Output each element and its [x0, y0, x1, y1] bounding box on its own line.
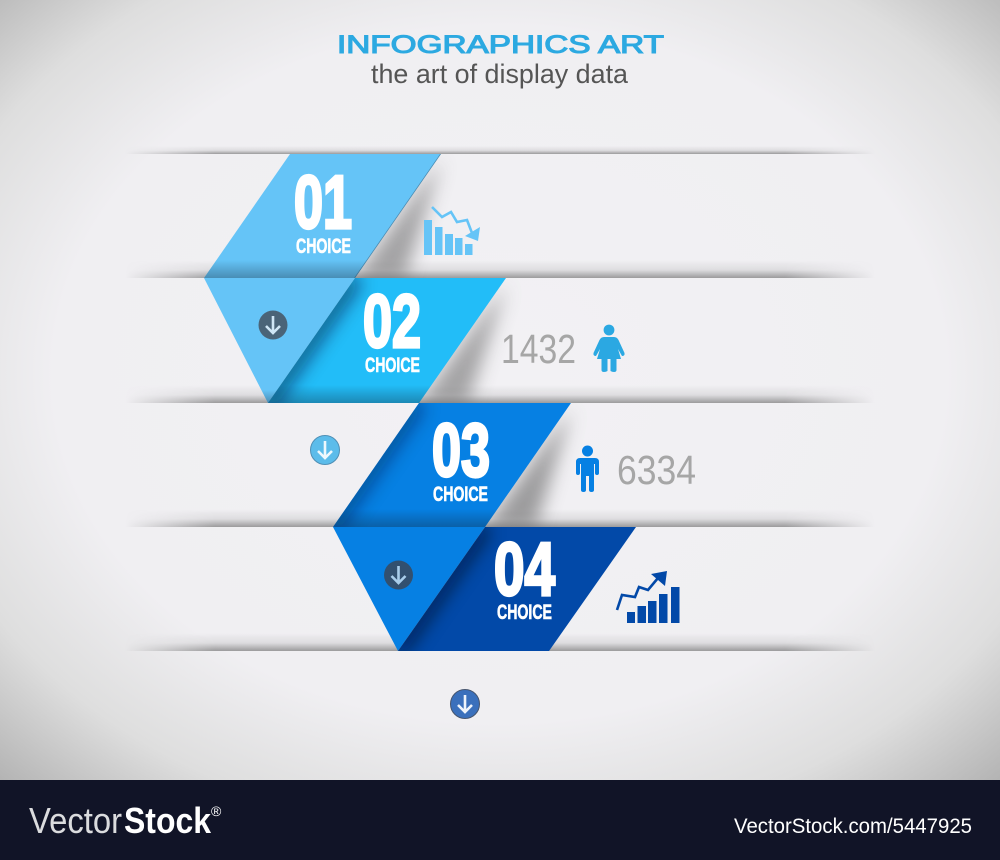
number 04 with label: CHOICE: [497, 601, 552, 624]
number 03 with label: [432, 408, 490, 506]
icon: arrow button on choice 03 fold: [384, 560, 413, 590]
number 02 with label: 02: [363, 279, 421, 363]
stat: 1432: 1432: [501, 326, 576, 372]
icon: arrow button bottom: [450, 690, 480, 718]
panel: choice 01 ribbon: [204, 154, 441, 278]
number 01 with label: [294, 160, 352, 258]
stat: 6334: 6334: [617, 447, 696, 493]
panel: triangle under choice 01: [204, 278, 355, 403]
panel: choice 03 ribbon: [333, 403, 571, 527]
subtitle: the art of display data: [371, 59, 629, 89]
number 02 with label: [363, 279, 421, 377]
number 03 with label: 03: [432, 408, 490, 492]
footer logo: Stock: [124, 800, 212, 841]
icon: rising bar chart: [617, 571, 680, 623]
icon: falling bar chart: [424, 207, 480, 255]
number 04 with label: 04: [494, 527, 555, 611]
number 03 with label: CHOICE: [433, 483, 488, 506]
footer logo: ®: [211, 803, 222, 819]
icon: arrow button on choice 01 fold: [258, 310, 288, 340]
panel: choice 04 ribbon: [398, 527, 636, 651]
footer logo: Vector: [29, 800, 122, 841]
footer logo: [29, 800, 222, 841]
number 01 with label: 01: [294, 160, 352, 244]
ribbon shading: [200, 154, 520, 651]
number 04 with label: [494, 527, 555, 624]
panel: choice 02 ribbon: [268, 278, 506, 403]
icon: male figure: [576, 446, 599, 492]
number 02 with label: CHOICE: [365, 354, 420, 377]
icon: female figure: [593, 325, 625, 372]
number 01 with label: CHOICE: [296, 235, 351, 258]
icon: arrow button row 2: [310, 436, 340, 464]
footer bar: [0, 780, 1000, 860]
row shadows: [125, 146, 875, 651]
diagonal cast shadows: [355, 160, 571, 527]
footer url: VectorStock.com/5447925: [734, 815, 972, 838]
title: INFOGRAPHICS ART: [337, 31, 664, 59]
panel: triangle under choice 03: [333, 527, 485, 651]
